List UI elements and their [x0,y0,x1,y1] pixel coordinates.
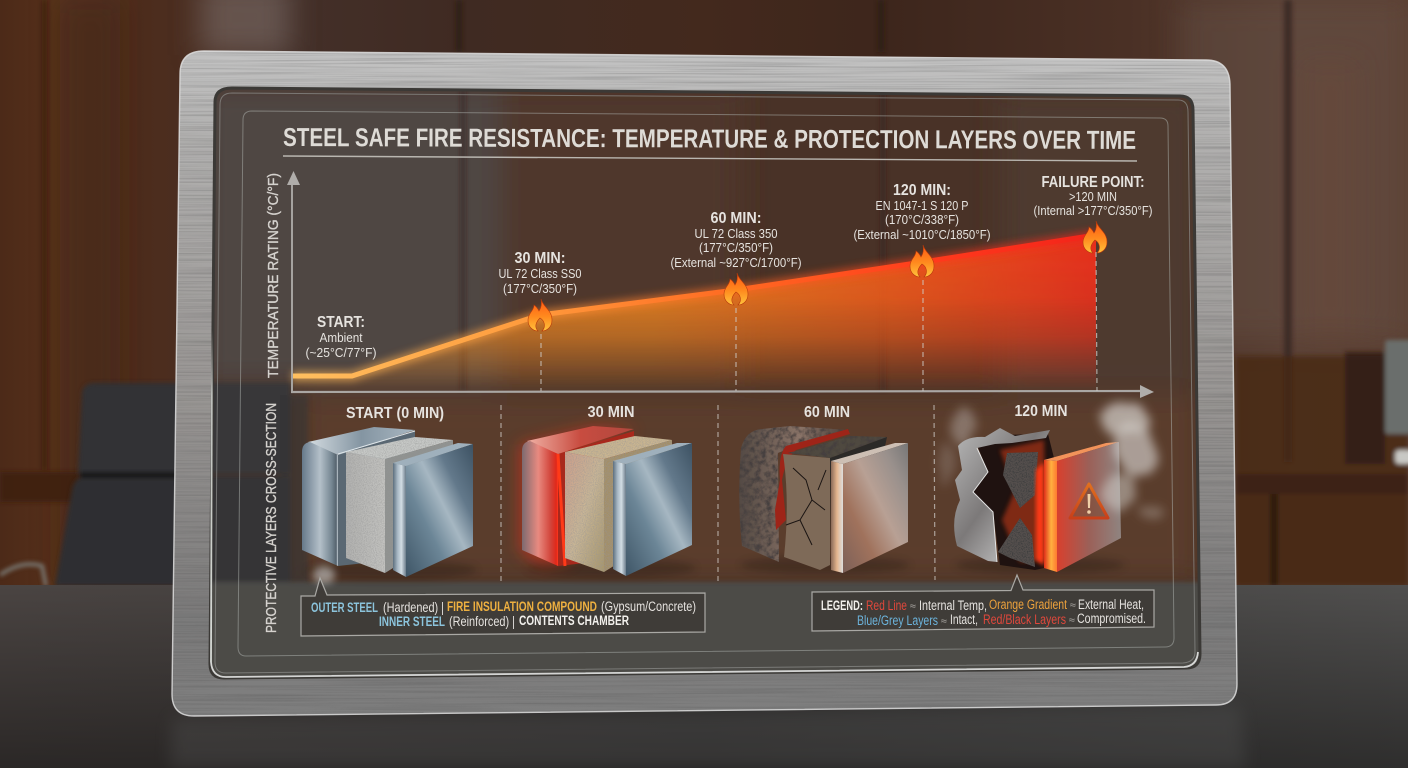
annotation: start [306,314,376,360]
inner steel [393,443,473,577]
layer block: 60 min, charred [739,426,910,574]
annotation: start: Ambient [320,331,363,345]
callout: layer key: (Hardened) | [383,600,444,615]
annotation: failure point: (Internal >177°C/350°F) [1034,204,1152,218]
annotation: 30 min: (177°C/350°F) [503,282,577,296]
inner steel [613,443,692,576]
callout: layer key [301,578,705,636]
y axis label: temperature: TEMPERATURE RATING (°C/°F) [265,173,282,378]
annotation: 60 min: (External ~927°C/1700°F) [670,256,802,270]
annotation: 60 min: (177°C/350°F) [699,241,773,255]
legend: Orange Gradient [989,597,1067,612]
layer block: 120 min, failed [937,402,1164,574]
cracked insulation [783,436,887,570]
legend: ≈ [1069,615,1075,625]
annotation: 30 min: 30 MIN: [514,250,566,267]
background smoke [937,407,976,487]
y axis [287,171,300,392]
annotation: failure point: >120 MIN [1069,190,1117,204]
time markers [541,252,1097,391]
legend: ≈ [941,616,947,626]
temperature line [292,235,1096,376]
legend: Internal Temp, [919,598,987,613]
annotation: failure point [1034,174,1152,218]
heated outer steel [522,426,634,566]
discoloured inner plate [831,443,908,573]
legend: Red/Black Layers [983,612,1066,627]
burst outer steel [954,428,1050,562]
annotation: start: (~25°C/77°F) [306,346,376,360]
legend: External Heat, [1078,597,1144,612]
annotation: 120 min: EN 1047-1 S 120 P [876,199,968,213]
desk surface [0,585,1408,768]
outer steel [302,427,415,566]
y axis label: layers: PROTECTIVE LAYERS CROSS-SECTION [264,403,280,633]
annotation: 120 min: (170°C/338°F) [885,213,959,227]
legend [812,575,1154,631]
annotation: 60 min [670,210,802,270]
callout: layer key: FIRE INSULATION COMPOUND [447,599,597,614]
legend: Intact, [950,612,978,627]
annotation: 120 min: (External ~1010°C/1850°F) [854,228,990,242]
glass panel [200,80,1210,682]
exposed burnt core [973,434,1055,570]
x axis [291,385,1154,398]
callout: layer key: (Reinforced) | [449,614,515,629]
title underline [283,156,1137,161]
background: blurred office [0,0,1408,590]
stage heading: 120 min: 120 MIN [1014,403,1068,420]
insulation [346,437,453,573]
warning triangle icon [1070,484,1108,518]
annotation: 120 min [854,182,990,242]
annotation: 30 min: UL 72 Class SS0 [498,267,582,281]
legend: ≈ [1070,600,1076,610]
callout: layer key: INNER STEEL [379,614,445,629]
callout: layer key: OUTER STEEL [311,600,378,615]
layer block: start, intact [302,427,477,584]
legend: Red Line [866,598,907,613]
legend: LEGEND: [821,598,863,613]
foreground smoke [1100,402,1164,518]
legend: ≈ [910,601,916,611]
red seam [775,429,850,530]
annotation: 60 min: 60 MIN: [710,210,762,227]
chart area fill [292,237,1096,392]
overheated inner plate [1044,442,1121,572]
chart line glow [292,235,1096,376]
steel frame [172,51,1237,716]
stage heading: 30 min: 30 MIN [588,404,634,421]
stage heading: start: START (0 MIN) [346,405,444,422]
flame markers [528,221,1107,331]
temperature chart [287,171,1154,398]
layer block: 30 min, heating [520,426,696,578]
annotation: start: START: [317,314,365,331]
annotation: failure point: FAILURE POINT: [1042,174,1144,191]
section dividers [501,405,935,582]
discoloured insulation [565,436,672,572]
legend: Compromised. [1077,611,1146,626]
callout: layer key: CONTENTS CHAMBER [519,613,629,628]
charred outer steel [739,426,849,562]
annotation: 30 min [498,250,582,296]
annotation: 60 min: UL 72 Class 350 [694,227,778,241]
annotation: 120 min: 120 MIN: [893,182,951,199]
title: STEEL SAFE FIRE RESISTANCE: TEMPERATURE & PROTECTION LAYERS OVER TIME [283,122,1136,155]
callout: layer key: (Gypsum/Concrete) [601,599,696,614]
legend: Blue/Grey Layers [857,613,938,628]
stage heading: 60 min: 60 MIN [804,404,850,421]
